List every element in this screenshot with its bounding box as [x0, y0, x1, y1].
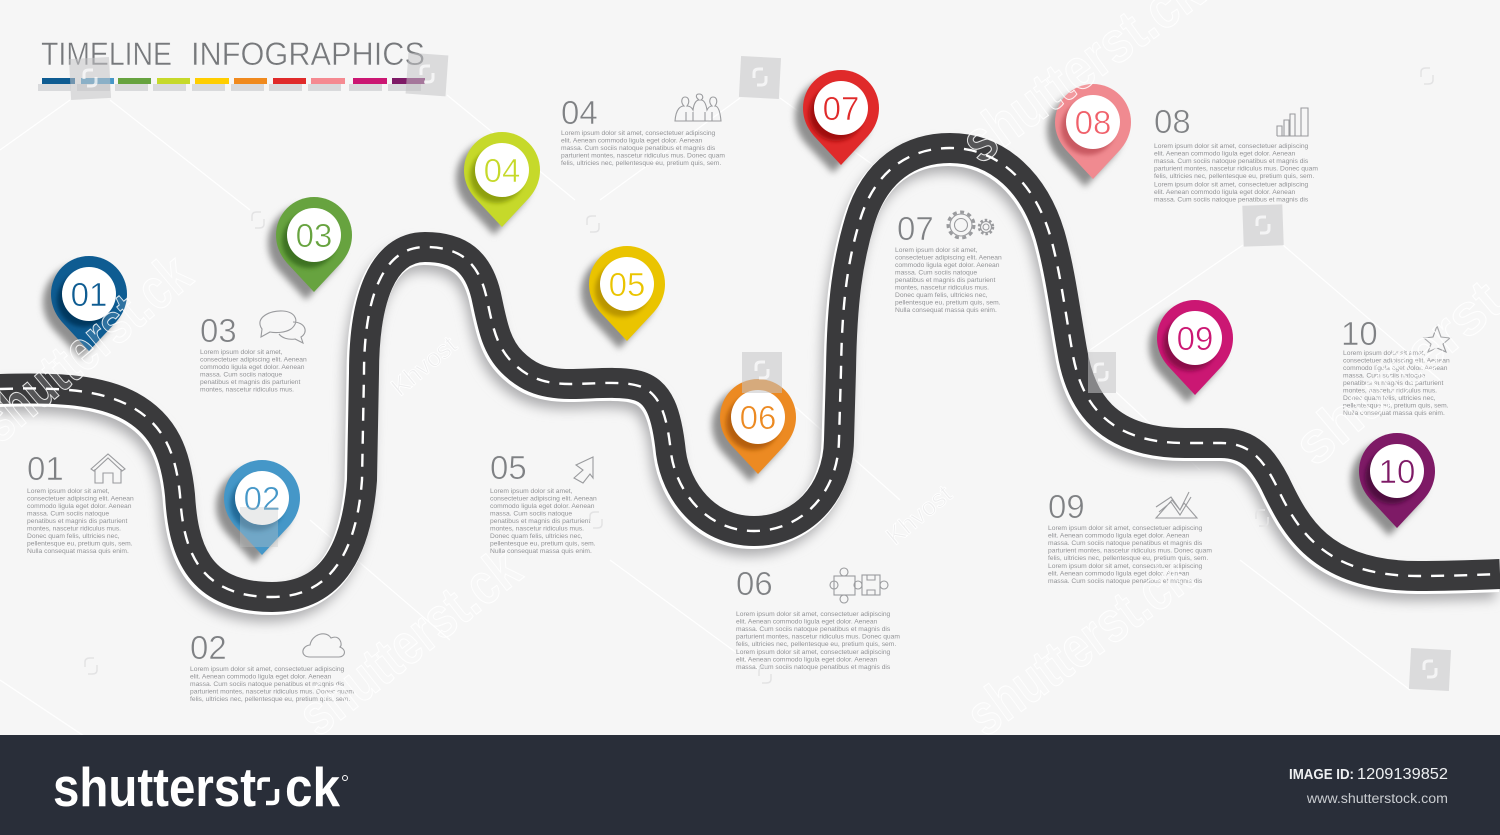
text block 01: Nulla consequat massa quis enim.: [27, 548, 129, 555]
text block 06: massa. Cum sociis natoque penatibus et magnis dis: [736, 664, 891, 671]
watermark name: Khvost: [386, 331, 462, 402]
watermark hooks: [84, 66, 1436, 677]
text block 06: Lorem ipsum dolor sit amet, consectetuer adipiscing: [736, 611, 891, 618]
pin 03: 03: [296, 217, 332, 254]
text block 10: pellentesque eu, pretium quis, sem.: [1343, 402, 1449, 410]
logo: ck: [285, 756, 340, 818]
text block 10: Nulla consequat massa quis enim.: [1343, 410, 1445, 417]
text block 09: Lorem ipsum dolor sit amet, consectetuer adipiscing: [1048, 563, 1203, 570]
text block 07: consectetuer adipiscing elit. Aenean: [895, 254, 1002, 262]
pin 05: [581, 246, 665, 349]
image id: IMAGE ID:: [1289, 766, 1354, 783]
watermark name: [386, 331, 957, 551]
site url: www.shutterstock.com: [1306, 791, 1448, 807]
text block 06: elit. Aenean commodo ligula eget dolor. Aenean: [736, 618, 878, 626]
logo: shutterst: [53, 756, 256, 818]
text block 03: 03: [200, 312, 237, 349]
text block 07: pellentesque eu, pretium quis, sem.: [895, 300, 1001, 306]
text block 02: felis, ultricies nec, pellentesque eu, pretium quis, sem.: [190, 696, 350, 703]
text block 05: montes, nascetur ridiculus mus.: [490, 526, 584, 532]
text block 09: [1048, 488, 1212, 585]
text block 10: montes, nascetur ridiculus mus.: [1343, 388, 1437, 394]
text block 08: massa. Cum sociis natoque penatibus et magnis dis: [1154, 196, 1309, 204]
text block 04: elit. Aenean commodo ligula eget dolor. Aenean: [561, 138, 703, 144]
text block 08: felis, ultricies nec, pellentesque eu, pretium quis, sem.: [1154, 173, 1314, 180]
text block 10: consectetuer adipiscing elit. Aenean: [1343, 358, 1450, 364]
pin 01: [43, 256, 127, 359]
text block 03: Lorem ipsum dolor sit amet,: [200, 349, 283, 356]
text block 01: consectetuer adipiscing elit. Aenean: [27, 496, 134, 502]
text block 05: massa. Cum sociis natoque: [490, 510, 572, 518]
text block 05: Nulla consequat massa quis enim.: [490, 548, 592, 555]
icon: cloud: [303, 634, 344, 657]
text block 06: 06: [736, 565, 773, 602]
text block 08: massa. Cum sociis natoque penatibus et magnis dis: [1154, 158, 1309, 165]
text block 02: [190, 629, 354, 703]
text block 08: 08: [1154, 103, 1191, 140]
text block 10: 10: [1341, 315, 1378, 352]
icon: bar chart: [1277, 108, 1308, 136]
image id: [1289, 766, 1448, 783]
text block 05: Donec quam felis, ultricies nec,: [490, 533, 583, 540]
text block 09: massa. Cum sociis natoque penatibus et magnis dis: [1048, 540, 1203, 547]
text block 06: [736, 565, 900, 671]
text block 06: massa. Cum sociis natoque penatibus et magnis dis: [736, 626, 891, 633]
watermark: shutterst.ck: [954, 542, 1205, 749]
watermark name: Khvost: [881, 480, 957, 551]
pin 05: 05: [609, 266, 645, 303]
icon: star: [1424, 326, 1450, 352]
pin 07: 07: [823, 90, 859, 127]
text block 06: parturient montes, nascetur ridiculus mus. Donec quam: [736, 634, 900, 640]
title: TIMELINE: [41, 36, 172, 72]
text block 10: [1341, 315, 1450, 417]
pin 08: 08: [1075, 104, 1111, 141]
text block 08: Lorem ipsum dolor sit amet, consectetuer adipiscing: [1154, 182, 1309, 188]
text block 08: [1154, 103, 1318, 204]
text block 02: elit. Aenean commodo ligula eget dolor. Aenean: [190, 674, 332, 680]
text block 07: montes, nascetur ridiculus mus.: [895, 284, 989, 292]
text block 07: commodo ligula eget dolor. Aenean: [895, 262, 1000, 269]
text block 01: penatibus et magnis dis parturient: [27, 518, 128, 525]
icon: people: [675, 94, 721, 121]
title: INFOGRAPHICS: [191, 36, 425, 72]
text block 05: consectetuer adipiscing elit. Aenean: [490, 496, 597, 502]
pin 10: 10: [1379, 453, 1415, 490]
road: [0, 148, 1500, 607]
text block 07: 07: [897, 210, 934, 247]
pin 03: [268, 197, 352, 300]
text block 01: commodo ligula eget dolor. Aenean: [27, 503, 132, 510]
text block 10: Donec quam felis, ultricies nec,: [1343, 395, 1436, 402]
title: [38, 36, 425, 91]
text block 06: felis, ultricies nec, pellentesque eu, pretium quis, sem.: [736, 641, 896, 648]
text block 05: penatibus et magnis dis parturient: [490, 518, 591, 525]
text block 03: consectetuer adipiscing elit. Aenean: [200, 356, 307, 364]
pin 02: 02: [244, 480, 280, 517]
text block 09: Lorem ipsum dolor sit amet, consectetuer adipiscing: [1048, 525, 1203, 532]
text block 02: Lorem ipsum dolor sit amet, consectetuer adipiscing: [190, 666, 345, 673]
text block 02: 02: [190, 629, 227, 666]
text block 03: commodo ligula eget dolor. Aenean: [200, 364, 305, 371]
text block 01: montes, nascetur ridiculus mus.: [27, 526, 121, 532]
footer bar: [0, 735, 1500, 835]
text block 08: Lorem ipsum dolor sit amet, consectetuer adipiscing: [1154, 143, 1309, 150]
outline hooks: [85, 68, 1433, 683]
text block 04: 04: [561, 94, 598, 131]
text block 08: parturient montes, nascetur ridiculus mus. Donec quam: [1154, 166, 1318, 172]
text block 04: felis, ultricies nec, pellentesque eu, pretium quis, sem.: [561, 160, 721, 167]
icon: line chart: [1156, 492, 1197, 518]
text block 03: massa. Cum sociis natoque: [200, 372, 282, 378]
text block 07: [895, 210, 1002, 314]
text block 03: penatibus et magnis dis parturient: [200, 379, 301, 386]
pin 09: 09: [1177, 320, 1213, 357]
colour legend strip: [38, 78, 425, 91]
text block 04: [561, 94, 725, 167]
text block 01: massa. Cum sociis natoque: [27, 510, 109, 518]
pin 02: [216, 460, 300, 563]
text block 09: parturient montes, nascetur ridiculus mus. Donec quam: [1048, 548, 1212, 554]
text block 05: Lorem ipsum dolor sit amet,: [490, 488, 573, 495]
text block 06: elit. Aenean commodo ligula eget dolor. Aenean: [736, 656, 878, 664]
icon: arrow: [574, 457, 593, 483]
text block 07: massa. Cum sociis natoque: [895, 270, 977, 276]
pin 01: 01: [71, 276, 107, 313]
text block 05: commodo ligula eget dolor. Aenean: [490, 503, 595, 510]
pin 07: [795, 70, 879, 173]
text block 09: elit. Aenean commodo ligula eget dolor. Aenean: [1048, 570, 1190, 578]
text block 07: Donec quam felis, ultricies nec,: [895, 292, 988, 299]
text block 10: penatibus et magnis dis parturient: [1343, 380, 1444, 387]
text block 04: parturient montes, nascetur ridiculus mus. Donec quam: [561, 152, 725, 160]
text block 03: montes, nascetur ridiculus mus.: [200, 386, 294, 394]
icon: puzzle: [830, 568, 888, 603]
text block 04: massa. Cum sociis natoque penatibus et magnis dis: [561, 145, 716, 152]
pin 08: [1047, 84, 1131, 187]
text block 05: 05: [490, 449, 527, 486]
text block 10: massa. Cum sociis natoque: [1343, 372, 1425, 380]
text block 03: [200, 311, 307, 394]
text block 05: [490, 449, 597, 555]
pin 09: [1149, 300, 1233, 403]
text block 01: Lorem ipsum dolor sit amet,: [27, 488, 110, 495]
text block 01: Donec quam felis, ultricies nec,: [27, 533, 120, 540]
icon: house: [91, 454, 125, 483]
text block 01: 01: [27, 450, 64, 487]
image id: 1209139852: [1357, 766, 1448, 783]
text block 07: Lorem ipsum dolor sit amet,: [895, 247, 978, 254]
text block 01: [27, 450, 134, 555]
text block 09: massa. Cum sociis natoque penatibus et magnis dis: [1048, 578, 1203, 585]
icon: speech bubbles: [260, 311, 305, 343]
text block 01: pellentesque eu, pretium quis, sem.: [27, 540, 133, 548]
pin 06: 06: [740, 399, 776, 436]
text block 04: Lorem ipsum dolor sit amet, consectetuer adipiscing: [561, 130, 716, 137]
pin 06: [712, 379, 796, 482]
text block 10: Lorem ipsum dolor sit amet,: [1343, 350, 1426, 357]
icon: gears: [948, 212, 993, 238]
text block 09: felis, ultricies nec, pellentesque eu, pretium quis, sem.: [1048, 555, 1208, 562]
text block 06: Lorem ipsum dolor sit amet, consectetuer adipiscing: [736, 649, 891, 656]
text block 07: penatibus et magnis dis parturient: [895, 277, 996, 284]
text block 09: 09: [1048, 488, 1085, 525]
pin 04: [456, 132, 540, 235]
text block 08: elit. Aenean commodo ligula eget dolor. Aenean: [1154, 150, 1296, 158]
pin 04: 04: [484, 152, 520, 189]
pin 10: [1351, 433, 1435, 536]
text block 05: pellentesque eu, pretium quis, sem.: [490, 540, 596, 548]
text block 02: parturient montes, nascetur ridiculus mus. Donec quam: [190, 688, 354, 696]
text block 08: elit. Aenean commodo ligula eget dolor. Aenean: [1154, 189, 1296, 196]
watermark squares: [69, 53, 1451, 691]
text block 02: massa. Cum sociis natoque penatibus et magnis dis: [190, 681, 345, 688]
text block 10: commodo ligula eget dolor. Aenean: [1343, 365, 1448, 372]
watermark: shutterst.ck: [286, 535, 533, 748]
text block 07: Nulla consequat massa quis enim.: [895, 307, 997, 314]
text block 09: elit. Aenean commodo ligula eget dolor. Aenean: [1048, 532, 1190, 540]
